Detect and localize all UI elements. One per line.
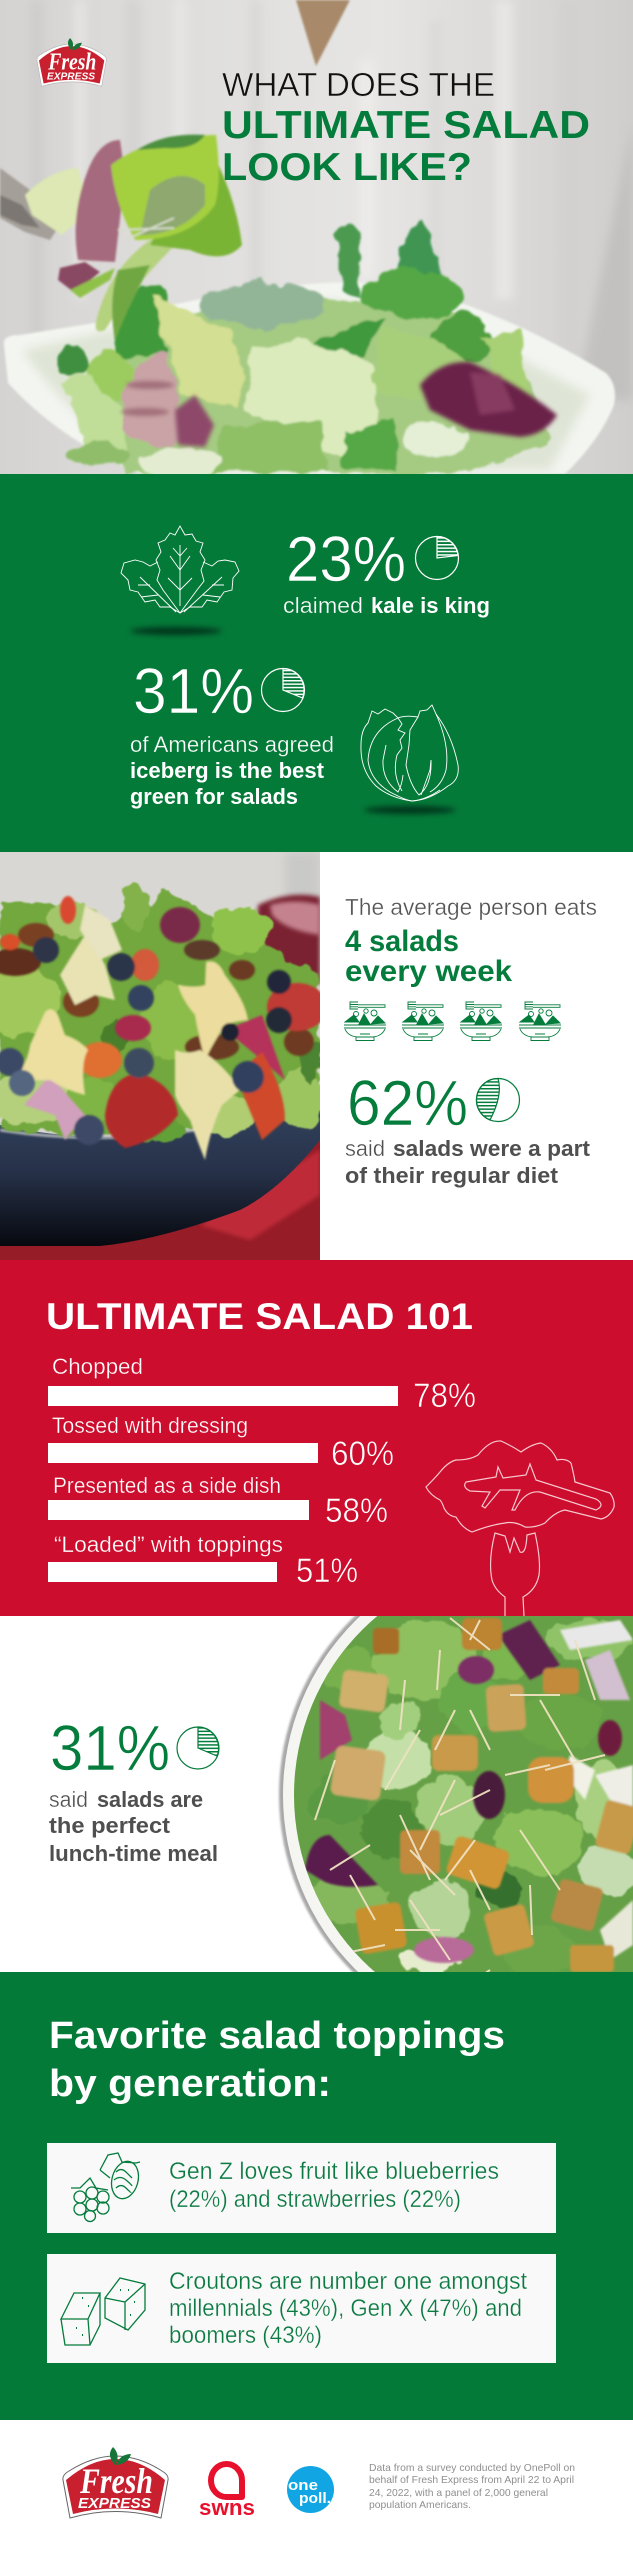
text: 4 salads every week xyxy=(345,925,512,988)
panel: footer xyxy=(63,2447,575,2520)
logo: Fresh Express xyxy=(63,2447,168,2518)
text: source note: behalf of Fresh Express from April 22 to April xyxy=(369,2474,574,2486)
text: regular diet: salads were a part xyxy=(393,1136,591,1161)
text: 4 salads every week: 4 salads xyxy=(345,925,459,958)
text: lunch-time meal: lunch-time meal xyxy=(49,1841,218,1866)
icon: pie 23% xyxy=(416,536,458,580)
heading xyxy=(49,2015,505,2105)
icon: iceberg lettuce xyxy=(361,705,458,801)
photo: caesar salad plate xyxy=(278,1616,633,1972)
bar: Chopped: 78% xyxy=(413,1377,476,1415)
text: claimed kale is king: kale is king xyxy=(371,593,490,618)
card: Gen Z xyxy=(47,2143,556,2233)
title xyxy=(222,67,590,189)
icon: croutons xyxy=(61,2278,145,2345)
bar: Side dish xyxy=(48,1473,388,1530)
photo: salad with stars xyxy=(0,852,327,1260)
bar: Tossed: 60% xyxy=(331,1435,394,1473)
text: source note: population Americans. xyxy=(369,2499,471,2511)
title: WHAT DOES THE xyxy=(222,67,495,104)
bar: Loaded: “Loaded” with toppings xyxy=(54,1532,283,1557)
panel: ultimate salad 101 xyxy=(0,1260,633,1616)
text: claimed kale is king: claimed xyxy=(283,593,363,618)
strawberries xyxy=(105,1073,178,1148)
bar: Chopped: Chopped xyxy=(52,1354,143,1379)
logo: Fresh Express (header) xyxy=(37,38,106,86)
text: iceberg stat: green for salads xyxy=(130,784,298,809)
title: ULTIMATE SALAD xyxy=(222,104,590,147)
leaves on fork xyxy=(0,135,242,340)
stat: 23%: 23% xyxy=(286,523,406,595)
stat: 62%: 62% xyxy=(347,1067,468,1139)
logo: Fresh Express (header): Fresh xyxy=(47,49,96,75)
icon: kale leaf shadow xyxy=(130,627,222,635)
logo: Fresh Express: Fresh xyxy=(79,2461,153,2501)
logo: Fresh Express (header): EXPRESS xyxy=(47,71,95,83)
logo: OnePoll: one xyxy=(288,2477,318,2494)
text: regular diet: of their regular diet xyxy=(345,1163,559,1188)
bowl body xyxy=(0,1095,320,1246)
icon: pie 31% green xyxy=(177,1727,219,1769)
icon: berries xyxy=(71,2153,142,2222)
text: regular diet: said xyxy=(345,1136,385,1161)
text: 4 salads every week: every week xyxy=(345,955,512,988)
napkin xyxy=(0,1130,320,1260)
text: Croutons: millennials (43%), Gen X (47%) and xyxy=(169,2295,522,2322)
greens xyxy=(0,880,325,1142)
text: Croutons: Croutons are number one amongst xyxy=(169,2268,527,2295)
text: regular diet xyxy=(345,1136,591,1188)
radicchio xyxy=(305,1835,378,1887)
panel: weekly salads xyxy=(344,894,597,1188)
text: Croutons: boomers (43%) xyxy=(169,2322,322,2349)
heading: ULTIMATE SALAD 101 xyxy=(46,1296,473,1337)
text: Gen Z xyxy=(169,2158,499,2213)
panel: favorite toppings xyxy=(0,1972,633,2420)
cheese shreds xyxy=(315,1618,605,1990)
card: Croutons xyxy=(47,2254,556,2363)
panel: hero photo xyxy=(0,0,633,476)
text: lunch-time meal xyxy=(49,1787,218,1866)
stat: 31%: 31% xyxy=(133,655,254,727)
text: iceberg stat: of Americans agreed xyxy=(130,732,334,757)
heading: by generation: xyxy=(49,2063,331,2105)
icon: iceberg shadow xyxy=(364,806,456,814)
text: Gen Z: (22%) and strawberries (22%) xyxy=(169,2186,461,2213)
logo: OnePoll xyxy=(287,2466,334,2513)
text: source note: Data from a survey conducted by OnePoll on xyxy=(369,2462,575,2474)
bowl xyxy=(4,282,615,474)
bar: Loaded xyxy=(48,1532,358,1590)
text: source note: 24, 2022, with a panel of 2,000 general xyxy=(369,2487,548,2499)
radicchio xyxy=(160,907,200,943)
text: lunch-time meal: the perfect xyxy=(49,1813,171,1838)
text: Gen Z: Gen Z loves fruit like blueberries xyxy=(169,2158,499,2185)
bar: Tossed: Tossed with dressing xyxy=(52,1413,248,1438)
stat: 31% lunch: 31% xyxy=(50,1712,170,1784)
plate rim xyxy=(278,1616,360,1972)
logo: SWNS: swns xyxy=(199,2495,255,2520)
text: Croutons xyxy=(169,2268,527,2349)
text: lunch-time meal: salads are xyxy=(97,1787,203,1812)
icon: kale leaf xyxy=(121,526,239,613)
text: average person: The average person eats xyxy=(345,894,597,920)
logo: SWNS xyxy=(199,2464,255,2520)
text: iceberg stat: iceberg is the best xyxy=(130,758,325,783)
icons: four salad bowls xyxy=(344,1002,561,1040)
bar: Tossed xyxy=(48,1413,394,1473)
bar chart xyxy=(48,1354,476,1590)
icon: pie 62% xyxy=(476,1078,520,1122)
skin triangle xyxy=(296,0,350,66)
text: lunch-time meal: said xyxy=(49,1787,88,1812)
bar: Chopped xyxy=(48,1354,476,1415)
bar: Loaded: 51% xyxy=(296,1552,358,1590)
text: source note xyxy=(369,2462,575,2511)
logo: Fresh Express: EXPRESS xyxy=(78,2495,151,2512)
pecans xyxy=(63,987,99,1017)
croutons xyxy=(330,1618,633,1972)
cheese stars xyxy=(18,1009,88,1095)
jar xyxy=(258,895,320,985)
panel: green stats xyxy=(0,474,633,852)
title: LOOK LIKE? xyxy=(222,146,472,189)
bar: Side dish: 58% xyxy=(325,1492,388,1530)
text: iceberg stat xyxy=(130,732,334,809)
text: claimed kale is king xyxy=(283,593,490,618)
panel: lunch stat xyxy=(49,1712,219,1866)
bar: Side dish: Presented as a side dish xyxy=(53,1473,281,1498)
blueberries xyxy=(232,1061,264,1093)
icon: pie 31% xyxy=(262,668,304,712)
heading: Favorite salad toppings xyxy=(49,2015,505,2057)
icon: lettuce on fork xyxy=(426,1441,614,1616)
logo: OnePoll: poll. xyxy=(299,2490,331,2507)
